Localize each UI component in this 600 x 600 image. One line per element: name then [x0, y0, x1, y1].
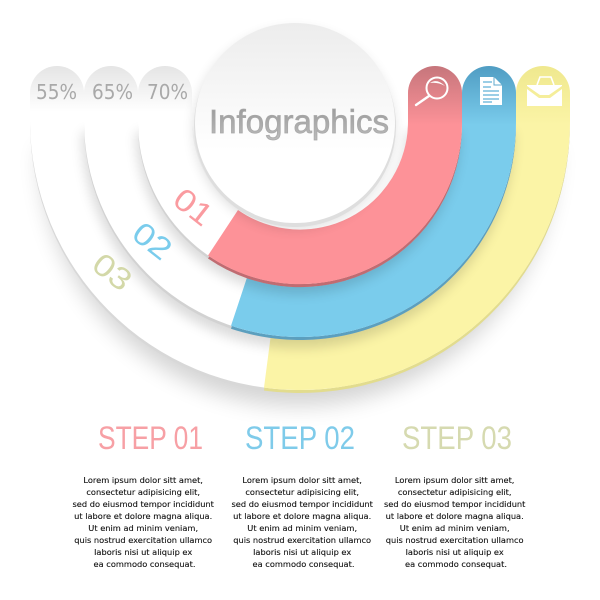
text block: step 02: Lorem ipsum dolor sitt amet, — [242, 475, 362, 485]
percent labels — [36, 80, 188, 104]
heading: step 03: STEP 03 — [402, 420, 512, 456]
text block: step 02: quis nostrud exercitation ullamco — [233, 535, 371, 545]
text block: step 01: Ut enim ad minim veniam, — [88, 523, 198, 533]
number 01: 01 — [167, 181, 220, 233]
text block: step 02: ut labore et dolore magna aliqua. — [233, 511, 371, 521]
text block: step 01: sed do eiusmod tempor incididunt — [72, 499, 215, 509]
icon: document — [480, 77, 502, 105]
ring 02 with blue band — [82, 66, 516, 348]
text block: step 02: sed do eiusmod tempor incididunt — [231, 499, 374, 509]
text block: step 03: Lorem ipsum dolor sitt amet, — [395, 475, 514, 485]
icon: briefcase — [527, 77, 562, 106]
title: Infographics — [209, 103, 389, 140]
text block: step 01: ea commodo consequat. — [94, 559, 195, 569]
number 03: 03 — [86, 246, 139, 298]
text block: step 03: quis nostrud exercitation ullamco — [386, 535, 524, 545]
percent labels: 55% — [36, 80, 77, 104]
ring 01 with pink band — [136, 66, 462, 294]
text block: step 03: consectetur adipisicing elit, — [398, 487, 512, 497]
percent labels: 65% — [92, 80, 133, 104]
text block: step 03: sed do eiusmod tempor incididunt — [384, 499, 526, 509]
text block: step 03: ea commodo consequat. — [405, 559, 507, 569]
icon: magnifier — [416, 78, 448, 105]
text block: step 01: consectetur adipisicing elit, — [86, 487, 200, 497]
heading: step 01: STEP 01 — [98, 420, 203, 456]
center circle — [194, 23, 396, 229]
text block: step 01: quis nostrud exercitation ullamco — [74, 535, 212, 545]
text block: step 03: laboris nisi ut aliquip ex — [406, 547, 504, 557]
text block: step 03: Ut enim ad minim veniam, — [400, 523, 510, 533]
percent labels: 70% — [147, 80, 188, 104]
text block: step 01: ut labore et dolore magna aliqua. — [74, 511, 212, 521]
text block: step 02: laboris nisi ut aliquip ex — [253, 547, 351, 557]
text block: step 01: laboris nisi ut aliquip ex — [94, 547, 192, 557]
text block: step 02: consectetur adipisicing elit, — [245, 487, 359, 497]
heading: step 02: STEP 02 — [245, 420, 355, 456]
text block: step 02: Ut enim ad minim veniam, — [247, 523, 357, 533]
text block: step 02: ea commodo consequat. — [253, 559, 354, 569]
number 02: 02 — [126, 215, 179, 267]
text block: step 01: Lorem ipsum dolor sitt amet, — [83, 475, 203, 485]
ring 03 with yellow band — [30, 66, 570, 406]
text block: step 03: ut labore et dolore magna aliqua. — [386, 511, 524, 521]
